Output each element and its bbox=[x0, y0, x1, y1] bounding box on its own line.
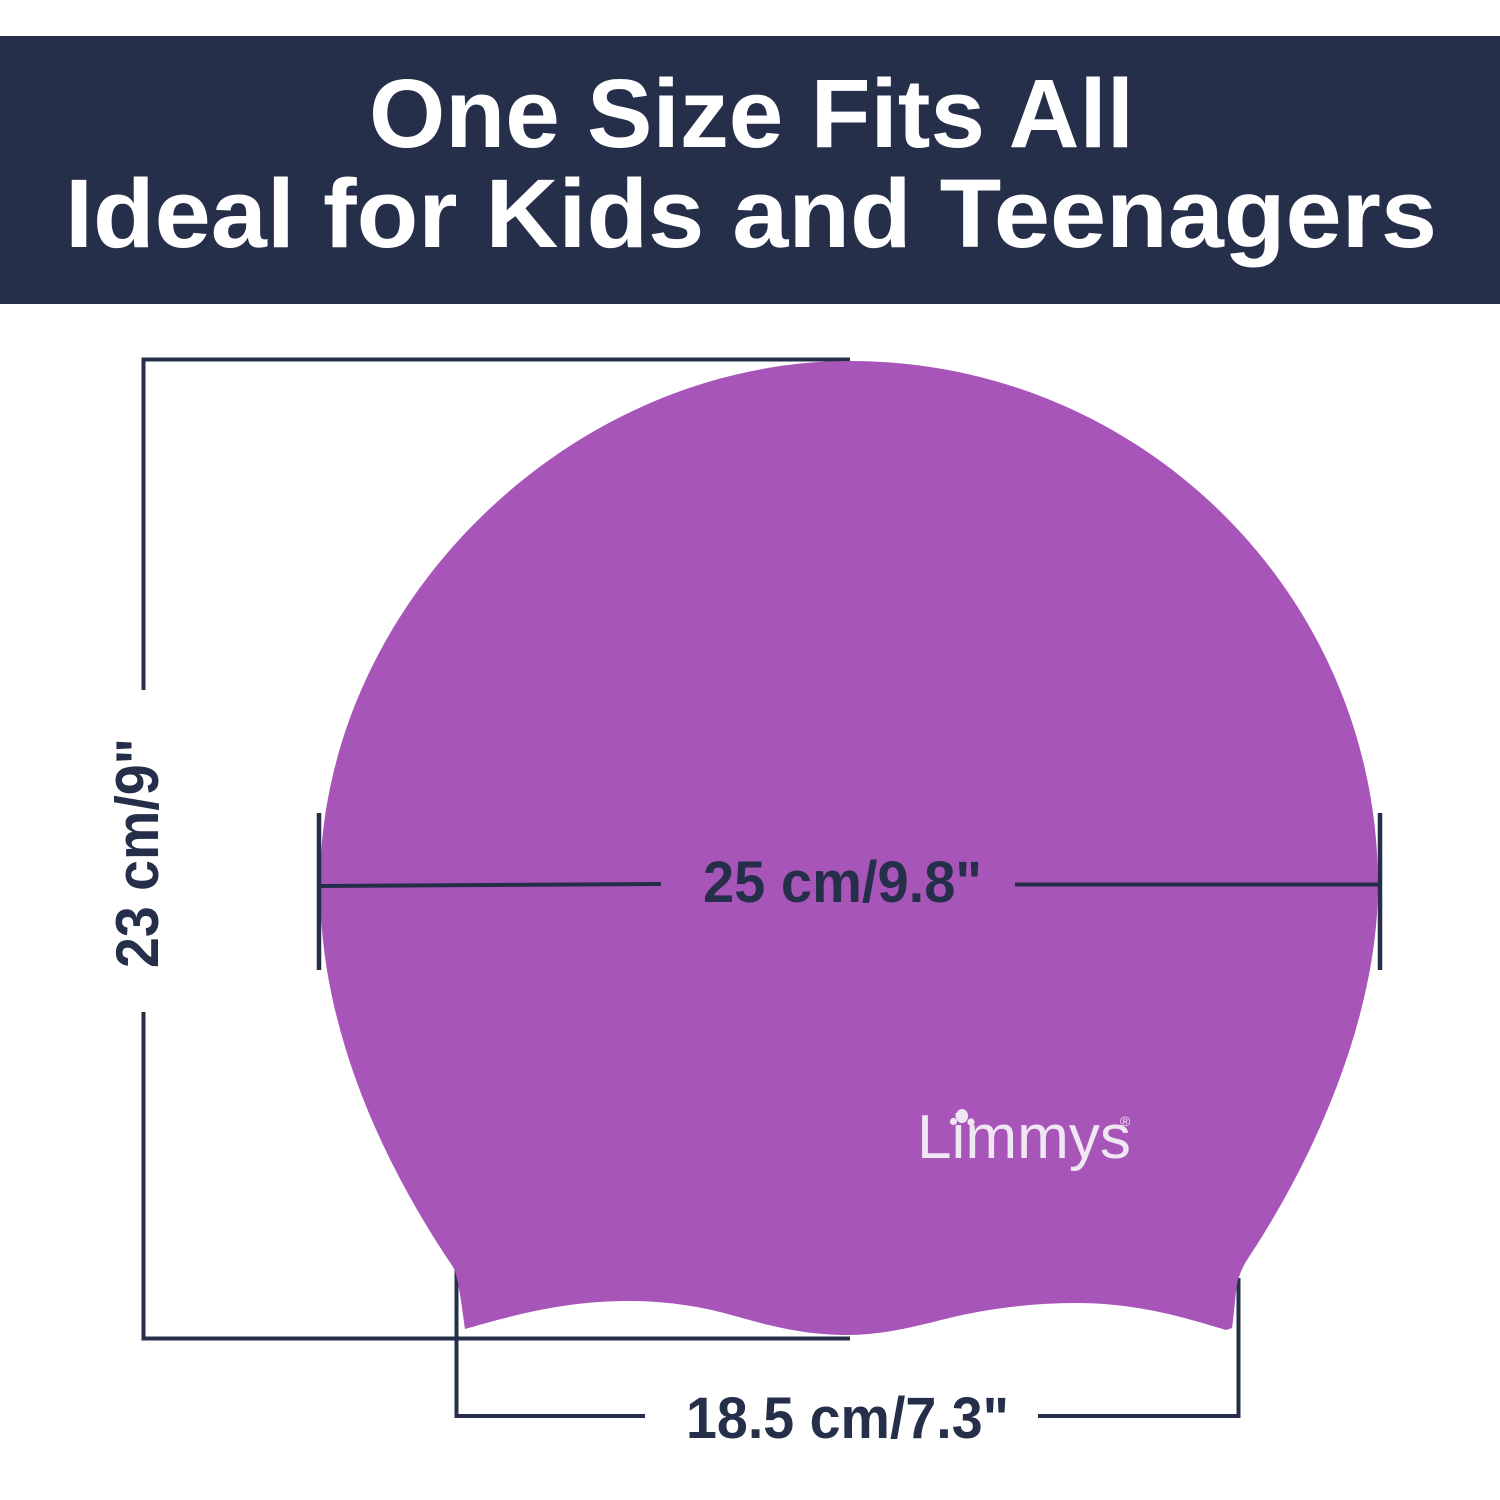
opening label: 18.5 cm/7.3" bbox=[686, 1386, 1009, 1451]
height dimension bracket bbox=[144, 360, 850, 1338]
logo flower dot bbox=[950, 1109, 975, 1126]
opening dimension bracket bbox=[456, 1270, 1238, 1416]
height label: 23 cm/9" bbox=[104, 738, 171, 968]
width label: 25 cm/9.8" bbox=[703, 850, 982, 915]
registered mark: ® bbox=[1120, 1113, 1131, 1129]
width dimension line bbox=[319, 813, 1380, 970]
brand logo: Limmys bbox=[917, 1103, 1131, 1172]
title banner bbox=[0, 36, 1500, 304]
title line 1: One Size Fits All bbox=[369, 59, 1134, 168]
title line 2: Ideal for Kids and Teenagers bbox=[65, 159, 1437, 268]
swim cap bbox=[320, 361, 1378, 1335]
